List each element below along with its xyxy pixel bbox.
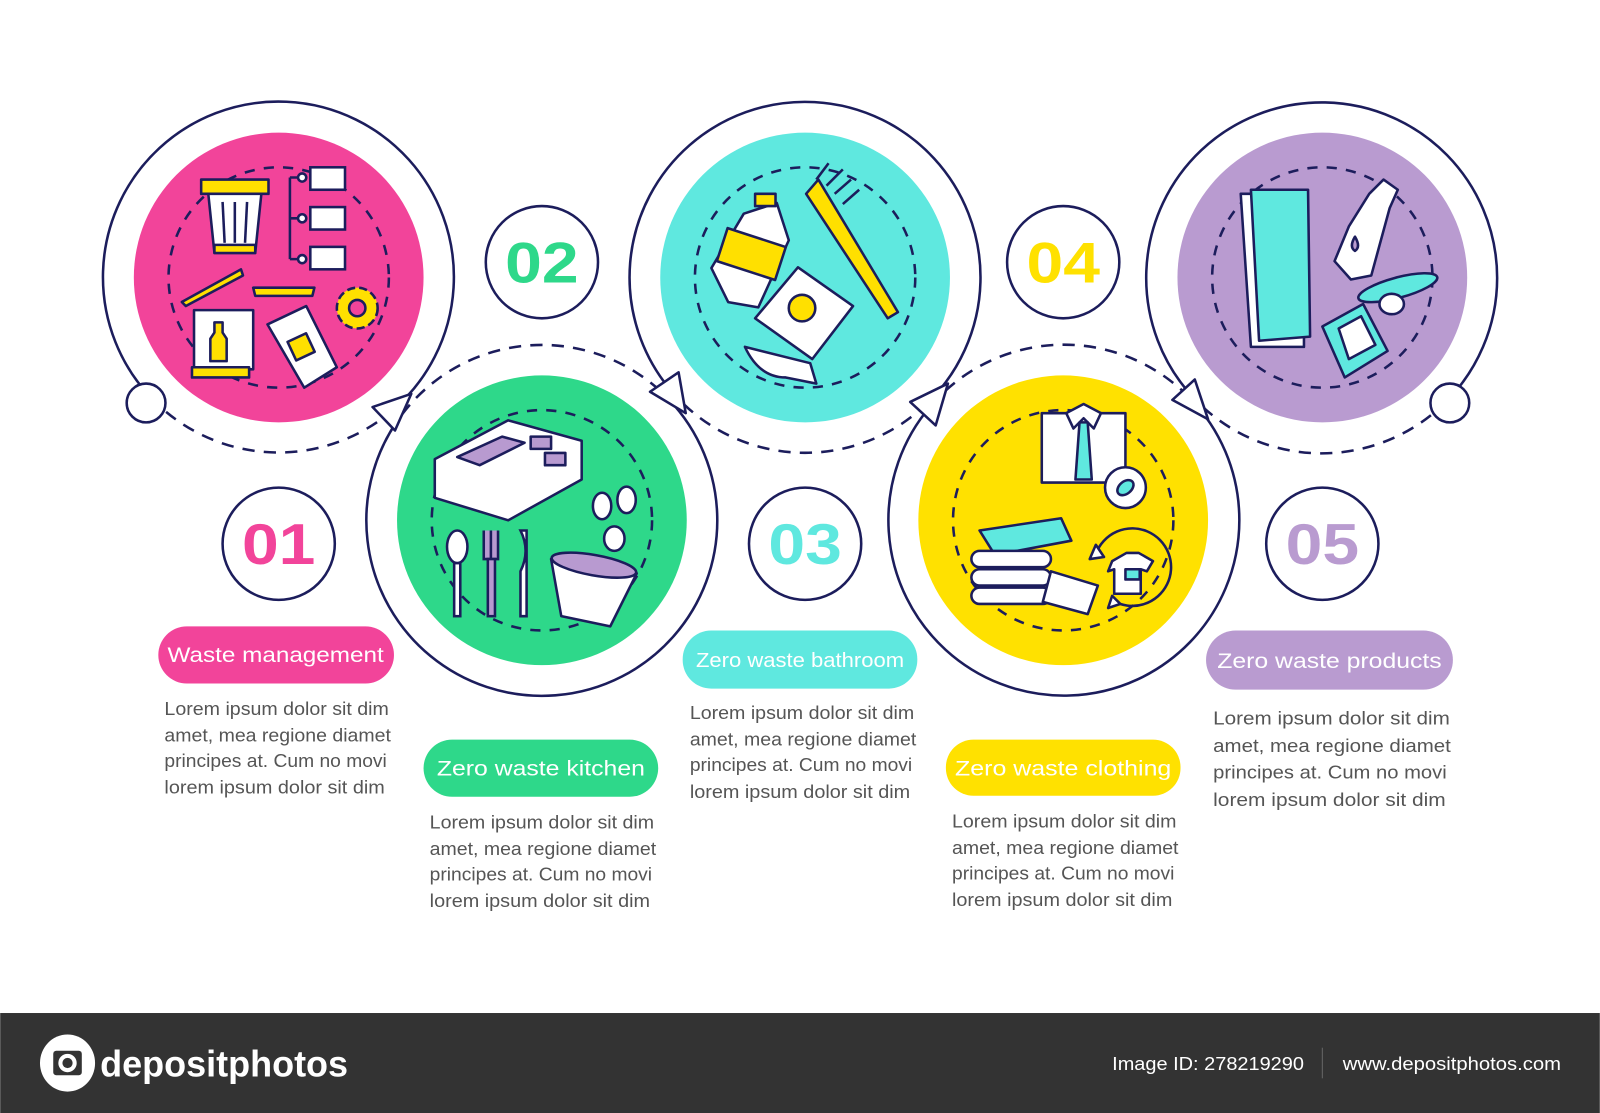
number badge 02: 02 — [505, 232, 579, 296]
panel: zero waste kitchen icon circle — [397, 375, 687, 665]
text block 3 — [690, 702, 916, 802]
label: zero waste clothing — [946, 740, 1181, 796]
icon: cup with lid — [1322, 267, 1440, 377]
text block 4: lorem ipsum dolor sit dim — [952, 889, 1172, 910]
text block 2: amet, mea regione diamet — [430, 838, 656, 859]
panel: waste management icon circle — [134, 133, 424, 422]
text block 4: amet, mea regione diamet — [952, 837, 1178, 858]
label: zero waste clothing: Zero waste clothing — [955, 756, 1171, 780]
arrow 1 — [373, 394, 411, 431]
text block 2: principes at. Cum no movi — [430, 863, 652, 884]
text block 5: amet, mea regione diamet — [1213, 735, 1451, 756]
label: zero waste bathroom — [683, 630, 917, 689]
text block 3: principes at. Cum no movi — [690, 754, 912, 775]
text block 5: principes at. Cum no movi — [1213, 761, 1447, 782]
icon: folded towel — [1241, 190, 1310, 347]
number badge 01 — [223, 488, 335, 600]
text block 2 — [430, 811, 656, 911]
number badge 01: 01 — [242, 513, 315, 577]
icon: cutlery — [447, 530, 527, 616]
text block 1: amet, mea regione diamet — [164, 725, 391, 746]
arrow 3 — [910, 384, 948, 425]
text block 5: lorem ipsum dolor sit dim — [1213, 789, 1446, 810]
text block 4: Lorem ipsum dolor sit dim — [952, 810, 1176, 831]
label: zero waste kitchen: Zero waste kitchen — [437, 756, 645, 780]
icon: recycle t-shirt — [1090, 528, 1171, 608]
icon: soap — [745, 267, 853, 384]
number badge 03: 03 — [768, 513, 842, 577]
number badge 05 — [1266, 488, 1378, 600]
flow ring: circle 5 — [1146, 102, 1497, 453]
flow ring: circle 3 — [630, 102, 980, 453]
arrow 2 — [650, 372, 686, 413]
flow ring: circle 2 — [366, 345, 717, 696]
arrow 4 — [1172, 380, 1208, 419]
label: waste management — [158, 626, 394, 684]
number badge 04 — [1007, 206, 1119, 318]
text block 1: lorem ipsum dolor sit dim — [164, 777, 385, 798]
icon: bottle — [706, 194, 795, 311]
text block 1 — [164, 698, 391, 798]
number badge 04: 04 — [1026, 232, 1100, 296]
label: zero waste bathroom: Zero waste bathroom — [696, 650, 904, 672]
text block 3: lorem ipsum dolor sit dim — [690, 781, 910, 802]
text block 1: Lorem ipsum dolor sit dim — [164, 698, 389, 719]
text block 2: lorem ipsum dolor sit dim — [430, 890, 650, 911]
number badge 03 — [749, 488, 861, 600]
icon: lids, cans, gear — [182, 269, 378, 388]
image id: Image ID: 278219290 — [1112, 1053, 1304, 1074]
footer bar — [0, 1013, 1600, 1113]
number badge 02 — [486, 206, 598, 318]
logo text: depositphotos — [100, 1043, 348, 1084]
text block 4 — [952, 810, 1178, 910]
icon: coffee filter — [550, 487, 638, 626]
icon: towels — [971, 518, 1098, 614]
start node — [127, 384, 165, 422]
panel: zero waste products icon circle — [1177, 133, 1467, 422]
flow ring: circle 1 — [103, 102, 454, 453]
text block 5 — [1213, 707, 1451, 810]
icon: shirt — [1042, 404, 1146, 508]
flow ring: circle 4 — [888, 345, 1239, 696]
end node — [1430, 384, 1469, 422]
text block 4: principes at. Cum no movi — [952, 862, 1174, 883]
label: waste management: Waste management — [167, 643, 384, 667]
website url: www.depositphotos.com — [1342, 1053, 1561, 1074]
text block 1: principes at. Cum no movi — [164, 750, 387, 771]
icon: camera logo — [40, 1034, 95, 1092]
panel: zero waste clothing icon circle — [918, 375, 1208, 665]
number badge 05: 05 — [1286, 513, 1359, 577]
icon: lunch box — [435, 420, 582, 520]
text block 3: amet, mea regione diamet — [690, 729, 916, 750]
text block 3: Lorem ipsum dolor sit dim — [690, 702, 914, 723]
icon: brush — [806, 163, 898, 318]
text block 2: Lorem ipsum dolor sit dim — [430, 811, 654, 832]
label: zero waste kitchen — [424, 740, 658, 797]
panel: zero waste bathroom icon circle — [660, 133, 950, 422]
label: zero waste products — [1206, 630, 1453, 690]
text block 5: Lorem ipsum dolor sit dim — [1213, 707, 1450, 728]
icon: trash bin — [201, 180, 268, 253]
label: zero waste products: Zero waste products — [1217, 649, 1442, 673]
icon: sorting list — [290, 167, 345, 269]
icon: plastic bottle — [1335, 180, 1398, 280]
